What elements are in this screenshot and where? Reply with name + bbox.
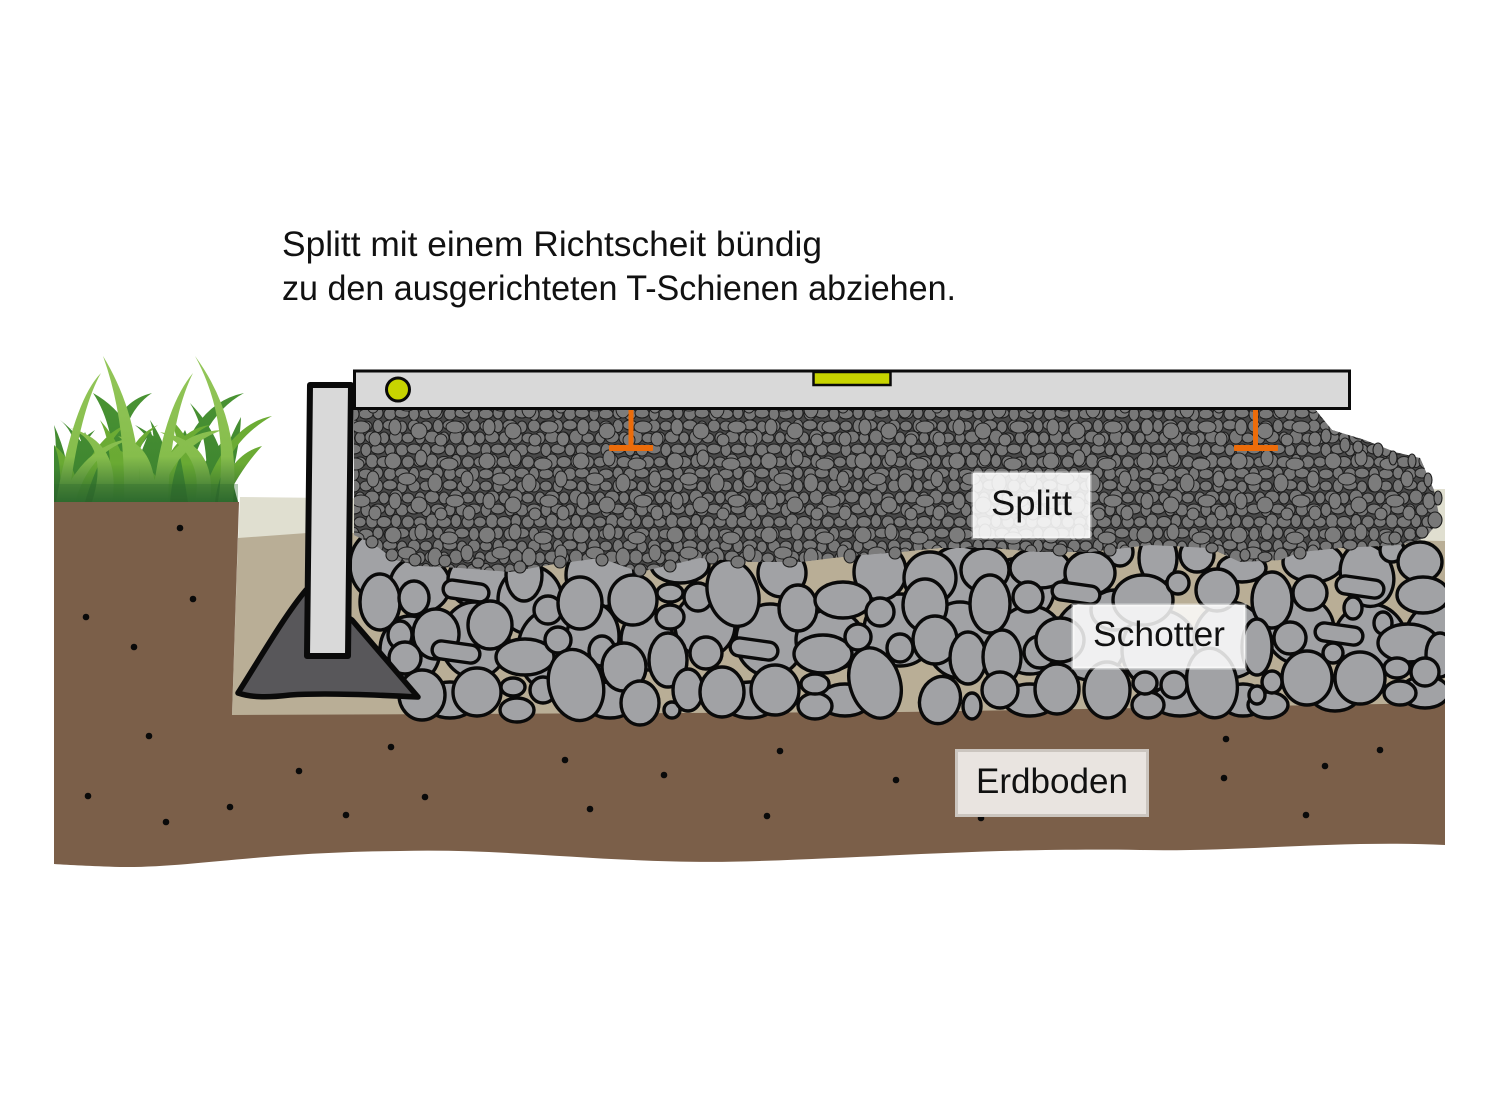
title text: Splitt mit einem Richtscheit bündig <box>282 225 822 264</box>
label: Erdboden <box>956 750 1148 816</box>
splitt edge pebbles <box>366 429 1442 576</box>
label: Schotter <box>1073 605 1245 668</box>
T-rail left <box>609 409 653 451</box>
level vial <box>814 372 890 385</box>
label: Schotter: Schotter <box>1093 615 1225 654</box>
curb stone <box>307 385 351 656</box>
straightedge spirit level <box>354 371 1350 408</box>
soil: Erdboden <box>54 502 1445 867</box>
level bubble <box>386 378 410 401</box>
title text: zu den ausgerichteten T-Schienen abziehen. <box>282 269 956 308</box>
grass <box>50 356 272 502</box>
label: Splitt <box>973 473 1090 538</box>
background: light gravel band <box>238 489 1445 545</box>
diagram: cross-section of paving bed <box>54 230 1445 867</box>
background: sand bed <box>232 533 1445 715</box>
label: Erdboden: Erdboden <box>976 762 1128 801</box>
label: Splitt: Splitt <box>991 484 1072 523</box>
soil dots <box>83 525 1383 825</box>
T-rail right <box>1234 409 1278 451</box>
concrete haunch <box>238 590 418 697</box>
crushed stone: Splitt layer <box>354 409 1442 576</box>
gravel: Schotter stones <box>350 531 1465 729</box>
title text <box>282 225 956 308</box>
